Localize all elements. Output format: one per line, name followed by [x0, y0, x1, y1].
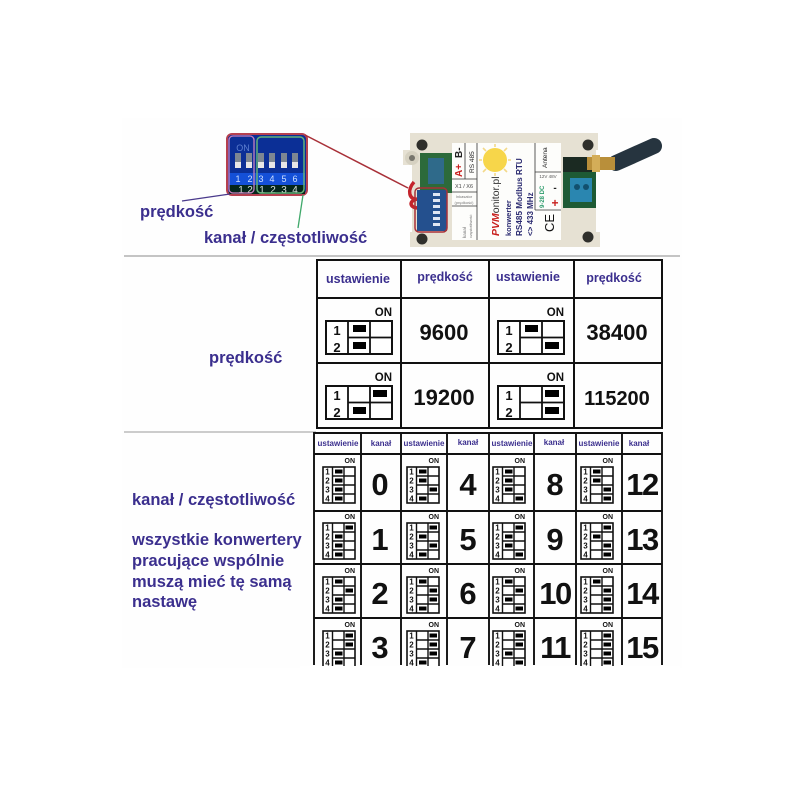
table: channel settings	[314, 433, 662, 668]
device label: konwerter	[504, 200, 513, 236]
DIP channel 10: 2	[495, 586, 500, 596]
DIP channel 13: 4	[583, 550, 588, 560]
DIP channel 7: 3	[409, 650, 414, 658]
DIP channel 15	[581, 622, 613, 668]
DIP channel 3: 3	[325, 650, 330, 658]
DIP channel 4: 2	[409, 476, 414, 486]
device label: X1 / X6	[455, 184, 473, 190]
DIP channel 12: 4	[583, 494, 588, 504]
DIP channel 7: 1	[409, 632, 414, 640]
DIP channel 10: 3	[495, 596, 500, 604]
DIP channel 14: 3	[583, 596, 588, 604]
table: speed settings: 19200	[413, 385, 475, 410]
DIP channel 1: ON	[344, 514, 355, 521]
DIP channel 9: 4	[495, 550, 500, 560]
DIP channel 6: 4	[409, 604, 414, 614]
DIP channel 14: 4	[583, 604, 588, 614]
blue DIP on board	[417, 190, 447, 231]
DIP channel 12: 3	[583, 486, 588, 494]
DIP channel 11: ON	[514, 622, 525, 629]
red wire	[410, 182, 418, 208]
table: channel settings: ustawienie	[492, 439, 533, 448]
DIP channel 4	[407, 458, 439, 504]
arrow: speed leader line	[182, 194, 230, 201]
DIP setting 38400: 1	[505, 323, 513, 338]
DIP channel 8: 3	[495, 486, 500, 494]
DIP channel 6: 1	[409, 578, 414, 586]
DIP channel 9	[493, 514, 525, 560]
device label: PVMonitor.pl	[490, 176, 502, 236]
DIP channel 3: 2	[325, 640, 330, 650]
text block: channel description: pracujące wspólnie	[132, 552, 284, 570]
channel numbers: 9	[546, 522, 564, 557]
arrow: channel leader line	[298, 195, 303, 228]
device label: B-	[454, 147, 465, 158]
table: channel settings: ustawienie	[318, 439, 359, 448]
DIP channel 3: 1	[325, 632, 330, 640]
device label: częstotliwość	[468, 214, 473, 238]
device label: RS 485	[469, 151, 476, 173]
table: speed settings: 9600	[420, 320, 468, 345]
DIP setting 19200	[326, 372, 392, 420]
DIP channel 2	[323, 568, 355, 614]
DIP channel 15: 4	[583, 658, 588, 668]
DIP channel 3	[323, 622, 355, 668]
DIP channel 4: 3	[409, 486, 414, 494]
channel numbers: 15	[626, 630, 659, 665]
DIP setting 9600	[326, 307, 392, 355]
DIP channel 2: 4	[325, 604, 330, 614]
DIP channel 0: 1	[325, 468, 330, 476]
DIP channel 7	[407, 622, 439, 668]
DIP channel 12: 2	[583, 476, 588, 486]
DIP setting 9600: 1	[333, 323, 341, 338]
channel numbers: 1	[371, 522, 389, 557]
green terminal left	[420, 153, 452, 193]
table: speed settings	[317, 260, 662, 428]
label: channel / frequency: kanał / częstotliwość	[204, 229, 367, 247]
DIP channel 0: ON	[344, 458, 355, 465]
DIP channel 14: 2	[583, 586, 588, 596]
DIP channel 11: 2	[495, 640, 500, 650]
channel numbers: 5	[459, 522, 477, 557]
table: channel settings: ustawienie	[404, 439, 445, 448]
DIP setting 38400	[498, 307, 564, 355]
DIP setting 38400: 2	[505, 340, 513, 355]
device enclosure	[403, 133, 600, 247]
DIP channel 2: 3	[325, 596, 330, 604]
table: speed settings: ustawienie	[496, 270, 560, 284]
DIP channel 10	[493, 568, 525, 614]
panel: DIP switch close-up: 1	[238, 185, 244, 196]
DIP channel 10: 4	[495, 604, 500, 614]
DIP channel 9: ON	[514, 514, 525, 521]
DIP channel 1: 1	[325, 524, 330, 532]
text block: channel description	[131, 491, 302, 611]
DIP channel 5: 3	[409, 542, 414, 550]
DIP setting 19200: ON	[375, 372, 392, 384]
DIP channel 11	[493, 622, 525, 668]
device label: -	[553, 183, 557, 194]
DIP setting 19200: 2	[333, 405, 341, 420]
DIP channel 0: 3	[325, 486, 330, 494]
DIP channel 2: 1	[325, 578, 330, 586]
DIP channel 5: ON	[428, 514, 439, 521]
DIP channel 12	[581, 458, 613, 504]
table: channel settings: kanał	[629, 439, 650, 448]
DIP channel 6	[407, 568, 439, 614]
panel: DIP switch close-up: 4	[292, 185, 298, 196]
DIP setting 115200: ON	[547, 372, 564, 384]
DIP channel 9: 3	[495, 542, 500, 550]
panel: DIP switch close-up: ON	[236, 143, 250, 153]
DIP setting 115200	[498, 372, 564, 420]
panel: DIP switch close-up: 4	[269, 174, 275, 184]
device label: kanał	[462, 227, 467, 238]
green terminal right	[563, 157, 596, 208]
DIP channel 9: 1	[495, 524, 500, 532]
channel numbers: 14	[626, 576, 660, 611]
channel numbers: 2	[371, 576, 389, 611]
device label: Inkasator	[456, 194, 473, 199]
channel numbers: 0	[371, 467, 389, 502]
heading: speed section: prędkość	[209, 349, 282, 367]
DIP channel 13: 3	[583, 542, 588, 550]
panel: DIP switch close-up: 2	[270, 185, 276, 196]
DIP channel 14: 1	[583, 578, 588, 586]
DIP channel 15: 1	[583, 632, 588, 640]
panel: DIP switch close-up: 1	[235, 174, 241, 184]
device label: Antena	[542, 147, 549, 168]
DIP channel 13: 2	[583, 532, 588, 542]
channel numbers: 6	[459, 576, 477, 611]
panel: DIP switch close-up: 3	[258, 174, 264, 184]
DIP channel 8: ON	[514, 458, 525, 465]
DIP channel 9: 2	[495, 532, 500, 542]
DIP channel 13	[581, 514, 613, 560]
DIP channel 5: 4	[409, 550, 414, 560]
DIP channel 5	[407, 514, 439, 560]
DIP setting 115200: 1	[505, 388, 513, 403]
channel numbers: 4	[459, 467, 477, 502]
device label: RS485 Modbus RTU	[515, 158, 524, 236]
DIP channel 12: 1	[583, 468, 588, 476]
channel numbers: 3	[371, 630, 389, 665]
text block: channel description: nastawę	[132, 593, 197, 611]
panel: DIP switch close-up: 2	[247, 174, 253, 184]
table: channel settings: kanał	[371, 439, 392, 448]
DIP channel 4: 1	[409, 468, 414, 476]
channel numbers: 8	[546, 467, 564, 502]
label: speed: prędkość	[140, 203, 213, 221]
DIP channel 1: 3	[325, 542, 330, 550]
arrow: red line to device	[305, 135, 408, 188]
panel: DIP switch close-up: 5	[281, 174, 287, 184]
device label: A+	[454, 164, 465, 177]
DIP channel 15: 3	[583, 650, 588, 658]
panel: DIP switch close-up: 2	[247, 185, 253, 196]
channel numbers: 13	[626, 522, 659, 557]
channel numbers: 12	[626, 467, 658, 502]
text block: channel description: kanał / częstotliwość	[132, 491, 295, 509]
DIP channel 6: ON	[428, 568, 439, 575]
DIP channel 0: 2	[325, 476, 330, 486]
DIP channel 1: 4	[325, 550, 330, 560]
DIP channel 5: 1	[409, 524, 414, 532]
DIP channel 8: 2	[495, 476, 500, 486]
DIP setting 115200: 2	[505, 405, 513, 420]
DIP channel 7: 4	[409, 658, 414, 668]
device label: +	[551, 196, 559, 210]
panel: DIP switch close-up	[227, 134, 307, 196]
device label: (prędkość)	[455, 200, 474, 205]
device label: <> 433 MHz	[526, 192, 535, 236]
DIP channel 15: ON	[602, 622, 613, 629]
text block: channel description: muszą mieć tę samą	[132, 573, 292, 591]
table: channel settings: ustawienie	[579, 439, 620, 448]
DIP channel 4: 4	[409, 494, 414, 504]
table: channel settings: kanał	[458, 438, 479, 447]
DIP channel 6: 2	[409, 586, 414, 596]
device label: CE	[542, 214, 557, 232]
table: speed settings: ustawienie	[326, 272, 390, 286]
DIP channel 14	[581, 568, 613, 614]
DIP setting 9600: 2	[333, 340, 341, 355]
DIP channel 1: 2	[325, 532, 330, 542]
DIP channel 8: 1	[495, 468, 500, 476]
illustration: converter device	[403, 133, 654, 247]
DIP channel 4: ON	[428, 458, 439, 465]
DIP channel 14: ON	[602, 568, 613, 575]
DIP setting 19200: 1	[333, 388, 341, 403]
DIP channel 13: 1	[583, 524, 588, 532]
DIP channel 10: ON	[514, 568, 525, 575]
DIP channel 0: 4	[325, 494, 330, 504]
panel: DIP switch close-up: 6	[292, 174, 298, 184]
device label: 9-28 DC	[540, 185, 546, 208]
DIP channel 1	[323, 514, 355, 560]
channel numbers: 10	[539, 576, 571, 611]
text block: channel description: wszystkie konwertery	[131, 531, 302, 549]
channel numbers: 7	[459, 630, 477, 665]
table: speed settings: prędkość	[417, 270, 473, 284]
icon: sun	[479, 144, 511, 176]
icon: antenna	[587, 146, 654, 172]
table: speed settings: 38400	[586, 320, 648, 345]
DIP channel 11: 4	[495, 658, 500, 668]
DIP channel 7: ON	[428, 622, 439, 629]
DIP channel 7: 2	[409, 640, 414, 650]
DIP channel 3: ON	[344, 622, 355, 629]
DIP channel 2: 2	[325, 586, 330, 596]
DIP channel 13: ON	[602, 514, 613, 521]
DIP channel 11: 1	[495, 632, 500, 640]
table: speed settings: 115200	[584, 388, 650, 410]
device label	[452, 143, 561, 240]
DIP channel 10: 1	[495, 578, 500, 586]
DIP channel 12: ON	[602, 458, 613, 465]
DIP channel 5: 2	[409, 532, 414, 542]
panel: DIP switch close-up: 3	[281, 185, 287, 196]
panel: DIP switch close-up: 1	[259, 185, 265, 196]
DIP setting 38400: ON	[547, 307, 564, 319]
DIP channel 8: 4	[495, 494, 500, 504]
DIP channel 2: ON	[344, 568, 355, 575]
channel numbers	[371, 467, 660, 665]
table: speed settings: prędkość	[586, 271, 642, 285]
DIP channel 15: 2	[583, 640, 588, 650]
channel numbers: 11	[540, 630, 571, 665]
DIP channel 8	[493, 458, 525, 504]
DIP channel 6: 3	[409, 596, 414, 604]
DIP setting 9600: ON	[375, 307, 392, 319]
device label: 12V 48V	[539, 174, 557, 179]
DIP channel 3: 4	[325, 658, 330, 668]
table: channel settings: kanał	[544, 438, 565, 447]
DIP channel 0	[323, 458, 355, 504]
DIP channel 11: 3	[495, 650, 500, 658]
